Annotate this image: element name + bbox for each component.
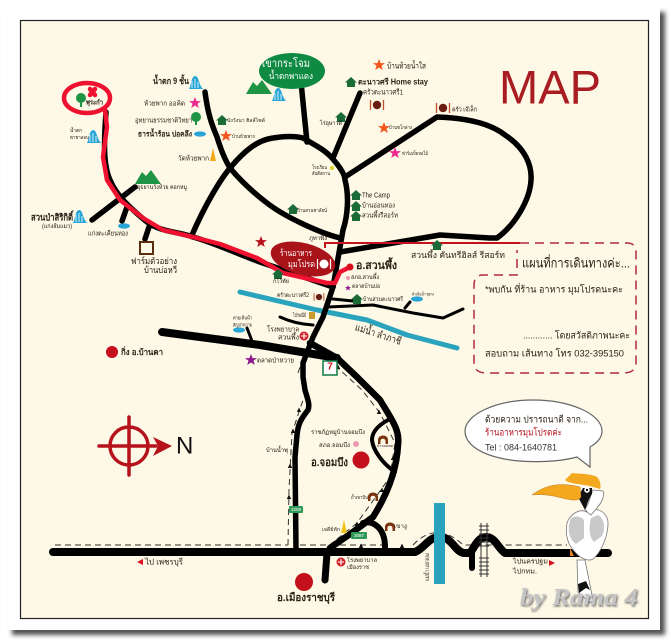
watermark: by Rama 4: by Rama 4 (520, 585, 638, 611)
label group: north-east attractions: ภูทาพึ้ง (309, 234, 327, 242)
label group: north-east attractions: บ้านสวนชาลัยน์ (297, 207, 328, 214)
label group: Chom Bueng and Ratchaburi: โรงพยาบาล (347, 556, 377, 564)
label group: Chom Bueng and Ratchaburi: ถ้ำจอมพล (377, 443, 393, 448)
label group: north-east attractions: สวนพึ้ง คันทรีฮิลส์ รีสอร์ท (411, 249, 505, 260)
label group: Chom Bueng and Ratchaburi: บ้านน้ำพุ (266, 444, 288, 454)
bridge: blue river bar (434, 503, 445, 584)
label group: Suan Phueng town: ตลาดบ้านบ่อ (352, 283, 380, 290)
label group: Chom Bueng and Ratchaburi: ไปกทม. (512, 568, 537, 576)
label group: north-west attractions: แก่งตะเคียนทอง (88, 230, 128, 238)
label group: Suan Phueng town: ดำเนินน้ำ พุยาง (412, 290, 434, 298)
speech bubble: ด้วยความ ปรารถนาดี จาก... (485, 414, 588, 426)
dashed info box: สอบถาม เส้นทาง โทร 032-395150 (485, 348, 624, 360)
dashed info box: แผนที่การเดินทางค่ะ... (522, 254, 630, 270)
label group: north-west attractions: อุทยานธรรมชาติวิทยา (135, 116, 192, 124)
restaurant oval marker: ร้านอาหาร (280, 248, 312, 258)
label group: Chom Bueng and Ratchaburi: ราชภัฏหมู่บ้านจอมบึง (311, 429, 365, 436)
speech bubble: Tel : 084-1640781 (485, 442, 557, 454)
label group: Suan Phueng town: โรงพยาบาล (267, 324, 299, 334)
label group: north-east attractions: The Camp (362, 192, 390, 200)
label group: Suan Phueng town: สภอ.สวนพึ้ง (351, 271, 379, 281)
label group: Suan Phueng town: บ้านสวนตะนาวศรี (363, 295, 404, 303)
label: Ban Kha district (106, 345, 163, 358)
red hand-drawn route (64, 83, 350, 283)
label group: north-west attractions (31, 74, 265, 275)
label group: Chom Bueng and Ratchaburi: อ.เมืองราชบุรี (277, 591, 335, 605)
label group: Suan Phueng town: ตลาดป่าหวาย (257, 358, 294, 364)
label group: north-west attractions: (แก่งส้มแมว) (42, 223, 72, 230)
label group: north-east attractions: สวนพึ้งรีสอร์ท (362, 208, 398, 220)
label: Ban Kha district: กิ่ง อ.บ้านคา (121, 345, 163, 357)
compass: north arrow: N (176, 432, 193, 460)
label group: north-east attractions: ครัวตะนาวศรี1 (363, 88, 403, 96)
label group: north-west attractions: อุธยานวังห้วย คอกหมู (137, 184, 187, 191)
label group: north-west attractions: น้ำตก (70, 125, 82, 134)
label group: north-east attractions: ครัว เจ๊เล็ก (452, 104, 477, 114)
label group: north-east attractions: ตะนาวศรี Home stay (358, 76, 428, 86)
dashed route lines with direction arrows (55, 328, 567, 548)
label group: Suan Phueng town: ครัวตะนาวศรี2 (277, 291, 310, 299)
label group: Chom Bueng and Ratchaburi: อ.จอมบึง (311, 456, 348, 469)
label group: north-west attractions: บ้านห้วยพาก (232, 133, 255, 140)
label group: north-east attractions: โรงเรียน (312, 164, 327, 171)
restaurant oval marker: มุมโปรด (288, 259, 315, 270)
label group: Suan Phueng town: ค่ายเห็นน้ำ (233, 314, 252, 320)
icon: tree Phu Rakam (76, 93, 86, 107)
label group: north-east attractions: บ้านชโกล่าง (389, 124, 412, 131)
icon: 7-Eleven store (323, 361, 337, 375)
river: Mae Nam Phachi (240, 292, 457, 348)
speech bubble: ร้านอาหารมุมโปรดค่ะ (485, 426, 562, 438)
label group: north-west attractions: ธารน้ำร้อน บ่อคลึง (138, 128, 192, 138)
dashed info box: *พบกัน ที่ร้าน อาหาร มุมโปรดนะคะ (485, 282, 623, 296)
label group: Suan Phueng town (233, 257, 434, 365)
dashed info box (474, 243, 636, 373)
label group: north-west attractions: น้ำตก 9 ชั้น (153, 74, 190, 86)
label group: Chom Bueng and Ratchaburi: เมืองราช (347, 564, 369, 571)
label group: north-west attractions: พุระกำ (86, 98, 103, 106)
label group: Suan Phueng town: อ.สวนพึ้ง (356, 257, 397, 272)
label group: north-east attractions: ไร่อุษาวดี (319, 119, 342, 127)
dashed info box: ............ โดยสวัสดิภาพนะคะ (523, 330, 630, 342)
label group: Chom Bueng and Ratchaburi: ไป เพชรบุรี (144, 558, 184, 566)
oval: Khao Krachom: เขากระโจม (262, 56, 310, 70)
label group: Suan Phueng town: สวนพึ้ง (278, 330, 299, 342)
icon: mountain and waterfall (246, 80, 286, 101)
label group: Chom Bueng and Ratchaburi: เขางู (394, 524, 407, 530)
label group: Chom Bueng and Ratchaburi: สภอ.จอมบึง (319, 442, 350, 449)
oval: Khao Krachom (259, 53, 325, 89)
label group: north-west attractions: บ้านบ่อหวี (144, 265, 177, 275)
label group: Chom Bueng and Ratchaburi (137, 429, 555, 605)
label group: Suan Phueng town: แม่น้ำ ลำภาชี (353, 319, 404, 348)
label group: north-east attractions: บ้านห้วยน้ำใส (387, 60, 426, 70)
label group: Suan Phueng town: ไปรษณีย์ (292, 312, 306, 319)
label group: Suan Phueng town: สัญป่าหวาย (233, 322, 252, 328)
title: MAP: MAP (499, 60, 601, 114)
label group: Chom Bueng and Ratchaburi: ไปนครปฐม (512, 558, 548, 566)
road network (53, 82, 608, 580)
label group: Chom Bueng and Ratchaburi: 3208 (291, 507, 302, 512)
speech bubble (465, 400, 602, 467)
railway track (479, 523, 489, 577)
oval: Khao Krachom: น้ำตกพาแดง (269, 69, 313, 81)
label group: north-west attractions: ห้วยพาก ออคิด (144, 100, 185, 108)
river label: Mae Klong: แม่น้ำ แม่กลอง (423, 553, 431, 581)
label group: north-west attractions: วัดห้วยพาก (178, 154, 209, 162)
label group: Chom Bueng and Ratchaburi: ถ้ำเขาบิน (351, 492, 368, 501)
illustration: hornbill bird (532, 473, 608, 603)
label group: Chom Bueng and Ratchaburi: 3087 (354, 533, 365, 538)
label group: north-east attractions: บ้านอ่อนทอง (362, 202, 395, 210)
label group: Suan Phueng town: กไว้ทัย (273, 277, 289, 285)
label group: north-west attractions: ฟาร์มตัวอย่าง (131, 255, 177, 266)
label group: north-east attractions (255, 59, 505, 260)
restaurant oval marker (267, 235, 339, 283)
label group: north-west attractions: บังวังนา ฮิลล์ไซด์ (227, 117, 265, 124)
label group: Chom Bueng and Ratchaburi: เจดีย์หัก (322, 526, 340, 533)
compass: north arrow (99, 417, 193, 475)
icon: 7-Eleven store: 7 (327, 362, 333, 372)
red road to resort (325, 243, 520, 248)
label group: north-west attractions: สวนป่าสิริกิติ์ (31, 210, 74, 224)
label group: north-east attractions: สันติสถาน (312, 170, 330, 177)
label group: north-west attractions: พาชาลอน (70, 135, 90, 141)
label group: north-east attractions: ฟาร์มเห็ดหอไม้ (402, 149, 428, 157)
